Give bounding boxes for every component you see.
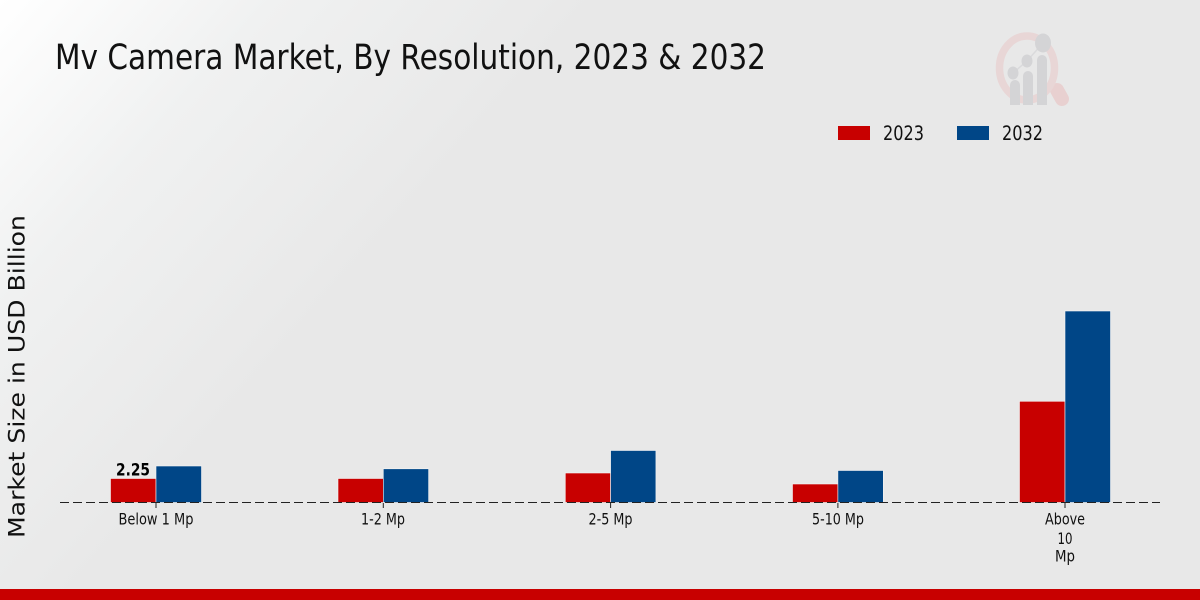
legend [838, 122, 1043, 145]
category labels: Above [1045, 510, 1085, 528]
footer bar [0, 589, 1200, 600]
category labels: 5-10 Mp [812, 510, 864, 528]
bar chart [60, 311, 1160, 566]
category labels: 1-2 Mp [361, 510, 405, 528]
category labels: Mp [1055, 546, 1075, 566]
baseline [60, 502, 1160, 504]
title: Mv Camera Market, By Resolution, 2023 & 2032 [55, 38, 766, 78]
category labels: Below 1 Mp [118, 510, 194, 528]
icon: watermark logo magnifier with bars [1000, 34, 1062, 105]
legend label 2023: 2023 [883, 122, 924, 145]
bars: 5-10 Mp [792, 470, 883, 502]
legend label 2032: 2032 [1002, 122, 1043, 145]
bars: 1-2 Mp [338, 469, 429, 502]
data label: 2.25 [116, 460, 150, 480]
bars: 2-5 Mp [565, 450, 656, 502]
legend swatch 2032 [957, 126, 989, 140]
bars: Below 1 Mp [110, 466, 202, 502]
y axis label: Market Size in USD Billion [6, 215, 30, 538]
legend swatch 2023 [838, 126, 870, 140]
category labels: 2-5 Mp [588, 510, 632, 528]
bars: Above 10 Mp [1020, 311, 1110, 502]
category labels: 10 [1058, 529, 1072, 548]
category labels [118, 510, 1085, 566]
